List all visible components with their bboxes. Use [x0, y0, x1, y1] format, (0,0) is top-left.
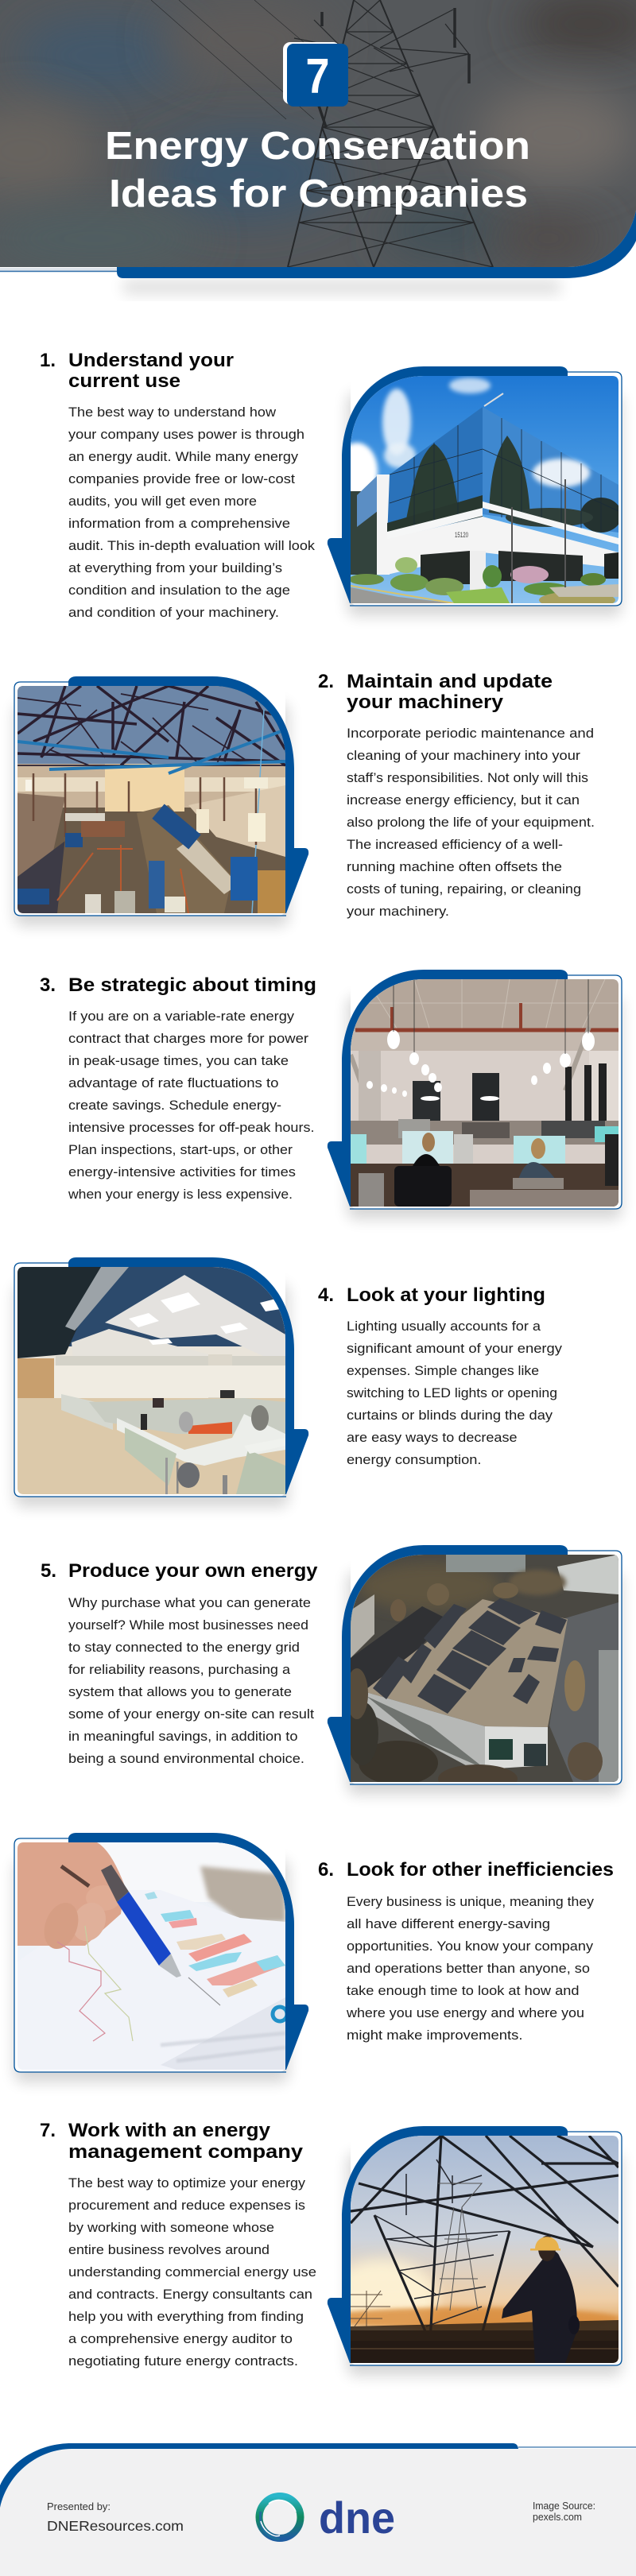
header thin rule [0, 268, 117, 272]
body text 3: energy-intensive activities for times [68, 1165, 296, 1180]
body text 2: staff’s responsibilities. Not only will this [347, 771, 588, 785]
image source [533, 2500, 595, 2523]
section 2: maintain and update your machinery [14, 671, 595, 926]
heading 6: 6. [318, 1859, 334, 1881]
footer [0, 2443, 636, 2576]
body text 1: companies provide free or low-cost [68, 472, 295, 486]
body text 1: audit. This in-depth evaluation will look [68, 539, 316, 553]
body text 3: create savings. Schedule energy- [68, 1098, 281, 1113]
title: Energy Conservation [105, 124, 530, 168]
body text 5: in meaningful savings, in addition to [68, 1730, 297, 1744]
heading 3: 3. [40, 974, 56, 996]
body text 6: all have different energy-saving [347, 1917, 550, 1931]
body text 6: opportunities. You know your company [347, 1939, 594, 1954]
section 5: produce your own energy [41, 1545, 622, 1795]
body text 2: The increased efficiency of a well- [347, 838, 563, 852]
body text 6: take enough time to look at how and [347, 1984, 579, 1998]
body text 4: curtains or blinds during the day [347, 1408, 553, 1423]
body text 3 [68, 1009, 315, 1202]
section 3: be strategic about timing [40, 970, 622, 1219]
heading 1 [40, 350, 234, 392]
body text 3: If you are on a variable-rate energy [68, 1009, 295, 1024]
image source: pexels.com [533, 2512, 582, 2523]
body text 1: at everything from your building’s [68, 561, 282, 575]
body text 5 [68, 1596, 314, 1766]
heading 5: 5. [41, 1560, 56, 1582]
body text 7: understanding commercial energy use [68, 2265, 316, 2280]
section 4: look at your lighting [14, 1257, 563, 1507]
body text 6: Every business is unique, meaning they [347, 1895, 595, 1909]
presented by [47, 2501, 184, 2534]
body text 1: and condition of your machinery. [68, 606, 279, 620]
body text 4: significant amount of your energy [347, 1342, 563, 1356]
image panel: worker silhouette and pylons at sunset [319, 2126, 622, 2376]
body text 2: your machinery. [347, 905, 449, 919]
image panel: glass office building: 15120 [455, 531, 468, 539]
footer thin rule [518, 2446, 636, 2448]
body text 3: Plan inspections, start-ups, or other [68, 1143, 293, 1157]
body text 7 [68, 2176, 316, 2369]
body text 5: to stay connected to the energy grid [68, 1641, 300, 1655]
image panel: open-plan office with pendant lights [328, 970, 622, 1219]
heading 1: 1. [40, 350, 56, 371]
badge: number 7 [283, 42, 348, 107]
body text 3: advantage of rate fluctuations to [68, 1076, 278, 1090]
body text 2: increase energy efficiency, but it can [347, 793, 580, 808]
section 6: look for other inefficiencies [14, 1833, 614, 2082]
body text 7: and contracts. Energy consultants can [68, 2287, 312, 2302]
heading 6: Look for other inefficiencies [347, 1859, 614, 1881]
body text 3: intensive processes for off-peak hours. [68, 1121, 315, 1135]
body text 6: might make improvements. [347, 2028, 523, 2043]
body text 7: a comprehensive energy auditor to [68, 2332, 293, 2346]
body text 5: system that allows you to generate [68, 1685, 292, 1699]
body text 4: expenses. Simple changes like [347, 1364, 539, 1378]
body text 5: yourself? While most businesses need [68, 1618, 308, 1633]
badge: number 7: 7 [305, 49, 329, 104]
body text 2 [347, 726, 595, 919]
heading 2: 2. [318, 671, 334, 692]
body text 5: for reliability reasons, purchasing a [68, 1663, 291, 1677]
body text 4: switching to LED lights or opening [347, 1386, 557, 1400]
body text 1: an energy audit. While many energy [68, 450, 299, 464]
body text 3: when your energy is less expensive. [68, 1187, 293, 1202]
body text 4: Lighting usually accounts for a [347, 1319, 541, 1334]
body text 7: entire business revolves around [68, 2243, 270, 2257]
section 7: work with an energy management company [40, 2120, 622, 2376]
heading 7: management company [68, 2141, 304, 2163]
body text 6: and operations better than anyone, so [347, 1962, 590, 1976]
header blue swoosh band [117, 211, 636, 278]
heading 2: your machinery [347, 691, 504, 713]
heading 1: current use [68, 370, 180, 392]
heading 4: 4. [318, 1284, 334, 1306]
header photo: transmission tower against cloudy sky [0, 0, 636, 267]
heading 1: Understand your [68, 350, 234, 371]
footer background [0, 2449, 636, 2576]
body text 1: The best way to understand how [68, 405, 276, 420]
body text 4 [347, 1319, 563, 1467]
body text 7: negotiating future energy contracts. [68, 2354, 298, 2369]
image panel: factory interior [14, 676, 308, 926]
body text 1 [68, 405, 316, 620]
body text 5: being a sound environmental choice. [68, 1752, 304, 1766]
body text 6: where you use energy and where you [346, 2006, 584, 2020]
heading 5: Produce your own energy [68, 1560, 318, 1582]
heading 7: Work with an energy [68, 2120, 271, 2141]
body text 3: contract that charges more for power [68, 1032, 309, 1046]
logo: dne [259, 2493, 395, 2543]
body text 3: in peak-usage times, you can take [68, 1054, 289, 1068]
body text 1: audits, you will get even more [68, 494, 257, 509]
body text 2: cleaning of your machinery into your [347, 749, 581, 763]
heading 3: Be strategic about timing [68, 974, 316, 996]
heading 7: 7. [40, 2120, 56, 2141]
body text 2: Incorporate periodic maintenance and [347, 726, 594, 741]
body text 7: help you with everything from finding [68, 2310, 304, 2324]
body text 7: The best way to optimize your energy [68, 2176, 306, 2191]
body text 7: by working with someone whose [68, 2221, 274, 2235]
presented by: DNEResources.com [47, 2518, 184, 2534]
body text 7: procurement and reduce expenses is [68, 2198, 305, 2213]
body text 1: information from a comprehensive [68, 517, 290, 531]
heading 4: Look at your lighting [347, 1284, 545, 1306]
body text 4: are easy ways to decrease [347, 1431, 517, 1445]
title: Ideas for Companies [109, 172, 528, 215]
body text 2: running machine often offsets the [347, 860, 562, 874]
image panel: hand with pen over bar charts [14, 1833, 308, 2082]
header banner [0, 0, 636, 294]
body text 5: Why purchase what you can generate [68, 1596, 311, 1610]
body text 6 [346, 1895, 595, 2043]
presented by: Presented by: [47, 2501, 111, 2512]
body text 5: some of your energy on-site can result [68, 1707, 314, 1722]
title [105, 124, 530, 215]
heading 2: Maintain and update [347, 671, 553, 692]
image panel: bright office with cubicles [14, 1257, 308, 1507]
tower [151, 0, 493, 267]
section 1: understand your current use [40, 350, 622, 620]
footer blue swoosh [0, 2443, 518, 2508]
body text 2: costs of tuning, repairing, or cleaning [347, 882, 581, 897]
body text 2: also prolong the life of your equipment. [347, 815, 595, 830]
body text 1: condition and insulation to the age [68, 583, 290, 598]
image panel: glass office building [328, 366, 622, 616]
image panel: aerial of rooftop solar panels [328, 1545, 622, 1795]
heading 2 [318, 671, 553, 713]
logo: dne: dne [319, 2493, 395, 2543]
body text 4: energy consumption. [347, 1453, 482, 1467]
body text 1: your company uses power is through [68, 428, 304, 442]
heading 7 [40, 2120, 304, 2163]
image source: Image Source: [533, 2500, 595, 2512]
